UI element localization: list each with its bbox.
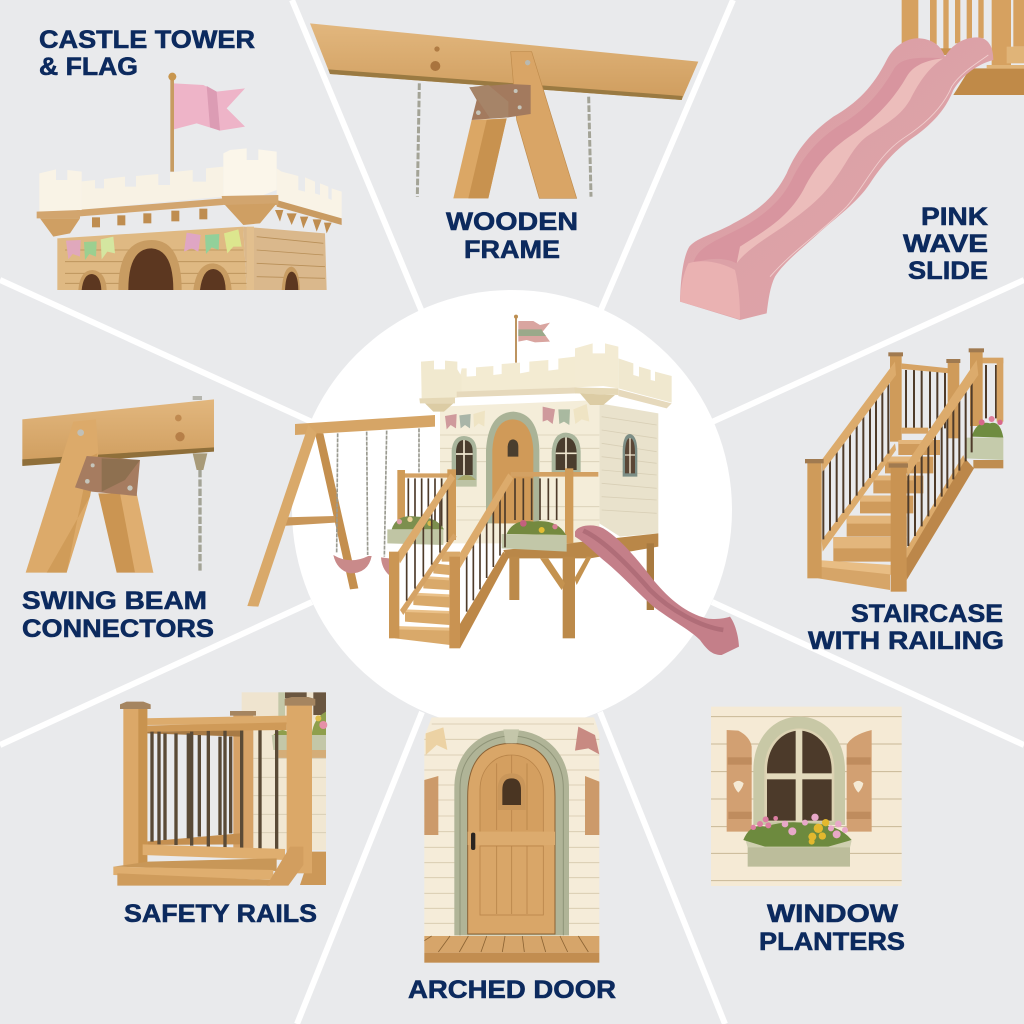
heading: wooden frame: WOODEN — [446, 208, 578, 236]
heading: window planters: WINDOW — [767, 900, 898, 928]
heading: window planters: PLANTERS — [759, 928, 905, 956]
heading: castle tower and flag: CASTLE TOWER — [39, 26, 255, 54]
heading: safety rails: SAFETY RAILS — [124, 900, 317, 928]
heading: swing beam connectors: SWING BEAM — [22, 587, 207, 615]
heading: castle tower and flag: & FLAG — [39, 53, 138, 81]
staircase — [389, 473, 513, 648]
deck railings — [397, 468, 598, 543]
panel: safety rails — [113, 692, 327, 928]
heading: staircase with railing: WITH RAILING — [808, 627, 1004, 655]
panel: swing beam connectors — [22, 396, 214, 643]
panel: pink wave slide — [680, 0, 1024, 320]
heading: pink wave slide — [903, 203, 988, 285]
planters — [387, 475, 567, 552]
bunting — [445, 404, 589, 429]
icon: beam connector — [22, 396, 214, 573]
swing set frame — [247, 415, 435, 607]
panel: arched door — [408, 717, 616, 1004]
icon: wooden beam with chains — [310, 23, 698, 198]
icon: castle tower — [37, 73, 342, 290]
slide — [575, 525, 739, 655]
heading: arched door: ARCHED DOOR — [408, 976, 616, 1004]
icon: pink slide and deck — [680, 0, 1024, 320]
battlements — [419, 343, 672, 412]
heading: pink wave slide: WAVE — [903, 230, 988, 258]
heading: swing beam connectors: CONNECTORS — [22, 615, 214, 643]
heading: window planters — [759, 900, 905, 956]
icon: safety railing — [113, 692, 327, 886]
heading: pink wave slide: SLIDE — [908, 257, 988, 285]
windows — [452, 433, 637, 480]
heading: wooden frame: FRAME — [464, 236, 560, 264]
support posts and deck — [503, 533, 658, 638]
icon: arched door — [424, 717, 599, 963]
center circle panel — [292, 290, 732, 730]
heading: wooden frame — [446, 208, 578, 264]
heading: castle tower and flag — [39, 26, 255, 81]
arched door — [486, 412, 539, 523]
heading: staircase with railing — [808, 600, 1004, 655]
panel: staircase with railing — [805, 348, 1004, 655]
heading: staircase with railing: STAIRCASE — [851, 600, 1003, 628]
heading: swing beam connectors — [22, 587, 214, 643]
central playset illustration — [247, 315, 739, 655]
panel: window planters — [711, 707, 905, 956]
heading: pink wave slide: PINK — [921, 203, 988, 231]
flag — [514, 315, 550, 363]
panel: wooden frame — [310, 23, 698, 264]
icon: window planter — [711, 707, 902, 886]
panel: castle tower and flag — [37, 26, 342, 290]
icon: staircase — [805, 348, 1003, 592]
tower walls — [440, 400, 658, 543]
